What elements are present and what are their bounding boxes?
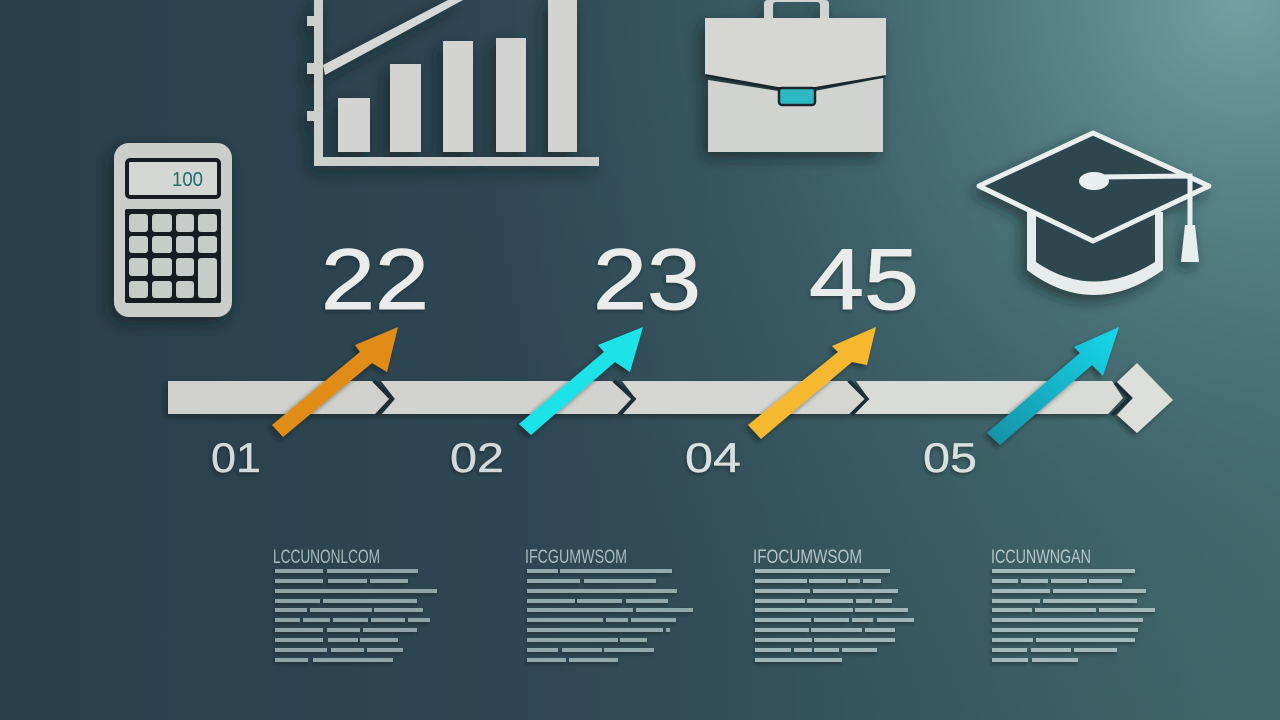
briefcase handle [764, 0, 829, 20]
chart bars [338, 0, 577, 152]
arrow 2: cyan [519, 327, 643, 435]
segment 4 [855, 381, 1123, 414]
calculator reading: 100 [172, 169, 203, 191]
cap base inner [1036, 212, 1155, 282]
block 4 heading: ICCUNWNGAN [991, 547, 1091, 568]
step label 01: 01 [211, 434, 261, 481]
arrow 3: yellow [748, 327, 876, 439]
cap button [1079, 172, 1109, 190]
step label 02: 02 [450, 434, 504, 481]
segment 2 [381, 381, 631, 414]
step label 04: 04 [685, 434, 741, 481]
block 1 heading: LCCUNONLCOM [273, 547, 380, 568]
text block 3 [753, 547, 914, 660]
tassel [1181, 225, 1199, 262]
briefcase clasp [779, 88, 815, 105]
segment 3 [622, 381, 865, 414]
timeline end arrowhead [1117, 363, 1173, 433]
cap base outer [1027, 212, 1163, 295]
icon: calculator [114, 143, 232, 317]
cap board [979, 133, 1209, 241]
block 3 body lines [755, 571, 914, 660]
block 2 body lines [527, 571, 693, 660]
arrow 4: teal [987, 327, 1119, 445]
value 45: 45 [809, 232, 919, 328]
step label 05: 05 [923, 434, 977, 481]
text block 4 [991, 547, 1155, 660]
block 3 heading: IFOCUMWSOM [753, 547, 862, 568]
briefcase flap seam [706, 75, 885, 88]
icon: graduation cap [979, 133, 1209, 295]
calculator screen [127, 160, 219, 197]
timeline arrow bar [168, 363, 1173, 433]
calculator keys [129, 214, 217, 298]
icon: briefcase [705, 0, 886, 152]
arrow 1: orange [272, 327, 398, 437]
cap button and cord [1095, 176, 1190, 228]
value 22: 22 [321, 232, 429, 328]
block 2 heading: IFCGUMWSOM [525, 547, 627, 568]
trend line [323, 0, 463, 75]
calculator body [114, 143, 232, 317]
block 1 body lines [275, 571, 437, 660]
calculator keypad [125, 209, 221, 303]
text block 2 [525, 547, 693, 660]
segment 1 [168, 381, 389, 414]
value 23: 23 [593, 232, 701, 328]
text block 1 [273, 547, 437, 660]
block 4 body lines [992, 571, 1155, 660]
chart axes and ticks [307, 0, 599, 166]
icon: bar chart with trend line [307, 0, 599, 166]
chevron gaps [374, 381, 1130, 415]
briefcase flap [705, 18, 886, 87]
briefcase lower body [708, 78, 883, 152]
